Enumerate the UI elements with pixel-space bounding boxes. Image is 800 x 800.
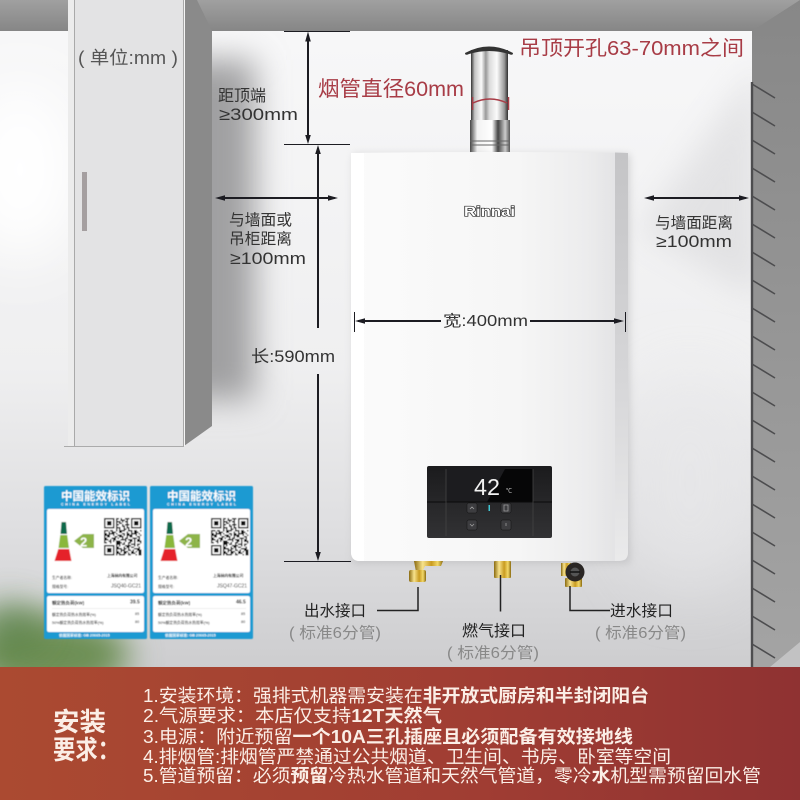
dimension: width arrow: [354, 312, 626, 332]
top clearance label: ≥300mm: [219, 105, 298, 124]
dimension: right clearance arrow: [644, 195, 749, 201]
requirements list: 3.电源：附近预留 一个10A三孔插座且必须配备有效接地线: [143, 726, 633, 747]
top clearance label: 距顶端: [218, 87, 266, 105]
label details: 85: [135, 612, 139, 616]
gas fitting: [494, 561, 511, 578]
requirements list: 5.管道预留：必须 预留冷热水管道和天然气管道，零冷 水机型需预留回水管: [143, 765, 761, 786]
label details: 上海林内有限公司: [213, 573, 244, 578]
energy label 2: [150, 486, 253, 639]
label details: 生产者名称:: [52, 575, 72, 580]
water outlet label: [289, 602, 381, 642]
green plant blur: [0, 601, 130, 695]
requirements heading: 要求：: [53, 735, 120, 765]
label details: 额定热负荷(kW): [158, 600, 191, 606]
brand logo: Rinnai: [464, 204, 515, 219]
label header: 中国能效标识: [167, 489, 236, 503]
label details: 规格型号:: [52, 584, 68, 589]
label details: JSQ47-GC21: [217, 584, 247, 590]
gas label: ( 标准6分管): [447, 644, 539, 662]
left clearance label: [229, 211, 306, 268]
panel buttons: [467, 503, 511, 530]
dimension: left clearance arrow: [215, 195, 338, 201]
leader lines: [377, 575, 610, 612]
label details: JSQ40-GC21: [111, 584, 141, 590]
right clearance label: ≥100mm: [656, 232, 732, 251]
gas label: [447, 622, 539, 662]
label details: [158, 573, 247, 625]
grade arrow: [74, 534, 94, 550]
label details: 额定热负荷热水热效率(%): [52, 612, 97, 617]
left clearance label: 与墙面或: [229, 211, 292, 229]
left clearance label: ≥100mm: [230, 249, 306, 268]
water heater: [351, 152, 630, 563]
label details: 80: [241, 620, 245, 624]
efficiency grade pyramid: [54, 522, 72, 561]
water outlet fitting: [409, 561, 443, 582]
ceiling band: [0, 0, 800, 31]
label details: 上海林内有限公司: [107, 573, 138, 578]
label details: 80: [135, 620, 139, 624]
gas label: 燃气接口: [462, 622, 526, 640]
right side wall with hatching: [752, 0, 800, 668]
label header: 中国能效标识: [61, 489, 130, 503]
standard footer: 依据国家标准: GB 20665-2015: [165, 632, 216, 638]
water inlet label: 进水接口: [610, 602, 673, 620]
dimension: top clearance arrow: [284, 32, 350, 144]
label details: 50%额定热负荷热水热效率(%): [52, 620, 104, 625]
label details: 生产者名称:: [158, 575, 178, 580]
label details: 50%额定热负荷热水热效率(%): [158, 620, 210, 625]
water outlet label: 出水接口: [304, 602, 366, 620]
water inlet label: [595, 602, 686, 642]
width label: 宽:400mm: [443, 312, 528, 330]
label main card: [47, 509, 144, 593]
flue pipe: [465, 46, 513, 153]
requirements list: 1.安装环境：强排式机器需安装在 非开放式厨房和半封闭阳台: [143, 685, 649, 706]
water outlet label: ( 标准6分管): [289, 624, 381, 642]
standard footer: 依据国家标准: GB 20665-2015: [59, 632, 110, 638]
water inlet fitting: [561, 562, 584, 587]
length label: 长:590mm: [251, 347, 335, 366]
requirements list: 2.气源要求：本店仅支持 12T天然气: [143, 705, 442, 726]
energy label 1: [44, 486, 147, 639]
label details: 规格型号:: [158, 584, 174, 589]
unit note: ( 单位:mm ): [78, 48, 178, 68]
requirements heading: [53, 707, 120, 765]
water inlet label: ( 标准6分管): [595, 624, 686, 642]
grade arrow: 2: [185, 534, 192, 550]
control panel: ℃: [506, 488, 512, 495]
requirements list: [143, 685, 761, 786]
wall cabinet: [64, 0, 212, 446]
label details: 额定热负荷热水热效率(%): [158, 612, 203, 617]
cabinet handle: [82, 172, 87, 231]
label details: 额定热负荷(kW): [52, 600, 85, 606]
energy label 1: CHINA ENERGY LABEL: [61, 502, 131, 506]
requirements list: 4.排烟管:排烟管严禁通过公共烟道、卫生间、书房、卧室等空间: [143, 747, 671, 767]
requirements heading: 安装: [53, 707, 106, 737]
flue diameter label: 烟管直径60mm: [318, 78, 464, 101]
label details: [52, 573, 141, 625]
grade arrow: 2: [80, 534, 87, 550]
ceiling hole label: 吊顶开孔63-70mm之间: [519, 37, 744, 60]
right clearance label: [655, 214, 733, 251]
label main card: [153, 509, 250, 593]
efficiency grade pyramid: [160, 522, 178, 561]
right clearance label: 与墙面距离: [655, 214, 733, 232]
control panel: [427, 466, 552, 538]
energy label 2: CHINA ENERGY LABEL: [167, 502, 237, 506]
label details: 39.5: [130, 600, 140, 606]
dimension: length arrow: [284, 145, 351, 562]
top clearance label: [218, 87, 298, 124]
flue diameter red marker: [472, 97, 508, 110]
grade arrow: [179, 534, 200, 550]
label details: 46.5: [236, 600, 246, 606]
temperature display: 42: [474, 474, 500, 500]
label details: 85: [241, 612, 245, 616]
heater body: [351, 152, 630, 563]
QR code: [104, 519, 142, 555]
installation requirements panel: [0, 667, 800, 800]
QR code: [211, 519, 248, 555]
left clearance label: 吊柜距离: [229, 230, 292, 248]
